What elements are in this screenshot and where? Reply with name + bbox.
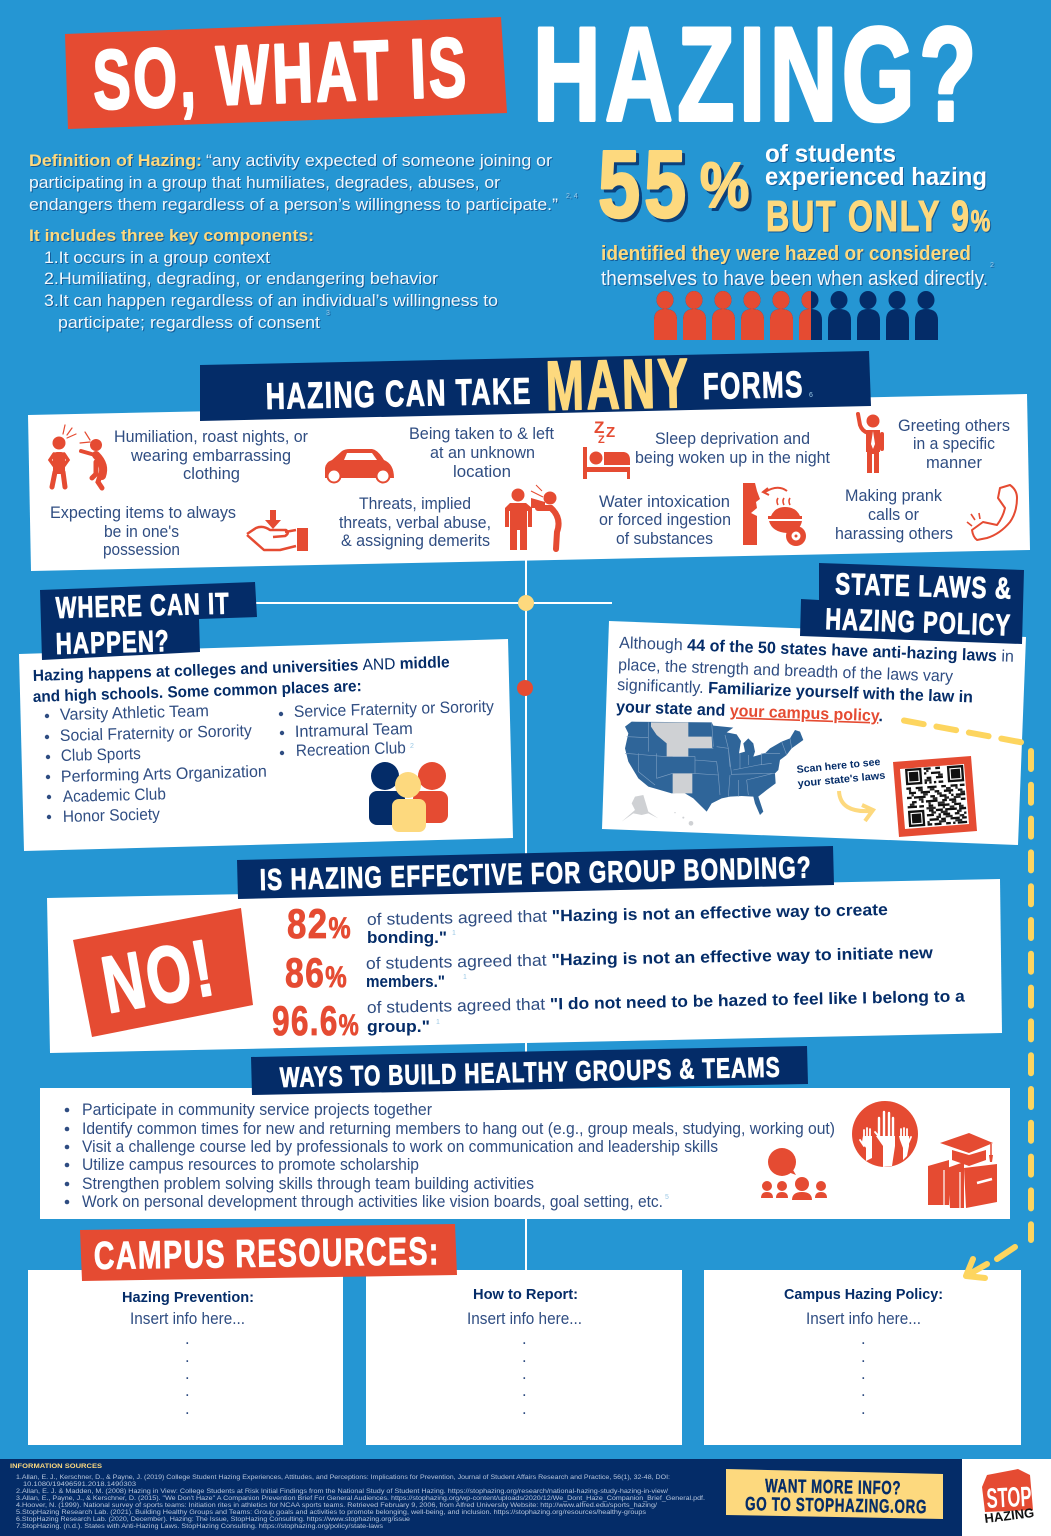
intro text: Hazing happens at colleges and universities AND middle bbox=[33, 654, 450, 685]
form: humiliation: wearing embarrassing bbox=[130, 447, 291, 465]
form: sleep deprivation: Sleep deprivation and bbox=[655, 430, 810, 448]
logo: stop hazing bbox=[962, 1459, 1051, 1536]
panel: is hazing effective bbox=[47, 846, 1002, 1053]
panel: how to report bbox=[366, 1270, 682, 1445]
panel: how to report: . bbox=[522, 1382, 527, 1400]
panel: many forms bbox=[28, 344, 1030, 571]
form: threats: Threats, implied bbox=[359, 495, 471, 513]
icon: books with cap bbox=[928, 1133, 997, 1208]
form: sleep deprivation: being woken up in the night bbox=[635, 449, 830, 467]
key components list: participate; regardless of consent bbox=[58, 313, 320, 332]
arrow: to QR code bbox=[839, 791, 873, 821]
panel: campus hazing policy: . bbox=[861, 1400, 866, 1418]
intro text: and high schools. Some common places are: bbox=[33, 678, 362, 706]
callout: want more info bbox=[726, 1469, 943, 1519]
stat text: of students experienced hazing bbox=[765, 140, 987, 191]
stat text: of students experienced hazing: of students bbox=[765, 140, 896, 168]
form: prank calls bbox=[835, 487, 953, 543]
panel: campus hazing policy: Campus Hazing Policy: bbox=[784, 1287, 943, 1303]
panel: campus hazing policy: . bbox=[861, 1348, 866, 1366]
stat: 86 percent: members." bbox=[366, 973, 445, 991]
panel: hazing prevention bbox=[28, 1270, 343, 1445]
callout: want more info: GO TO STOPHAZING.ORG bbox=[745, 1494, 927, 1518]
state laws text: your state and your campus policy. bbox=[616, 698, 883, 725]
panel: hazing prevention: . bbox=[185, 1382, 190, 1400]
heading: hazing can take many forms: MANY bbox=[545, 344, 691, 425]
form: water intoxication: of substances bbox=[616, 530, 713, 548]
heading: hazing can take many forms bbox=[200, 344, 871, 425]
panel: how to report: . bbox=[522, 1348, 527, 1366]
form: expecting items: be in one's bbox=[104, 523, 179, 541]
stat: 82 percent: 82% bbox=[287, 900, 352, 947]
panel: how to report: . bbox=[522, 1365, 527, 1383]
stat: but only 9 percent: BUT ONLY 9% bbox=[766, 192, 992, 241]
panel: campus hazing policy: . bbox=[861, 1382, 866, 1400]
form: greeting others: in a specific bbox=[913, 435, 995, 453]
form: prank calls: calls or bbox=[868, 506, 919, 524]
list: common places left: Honor Society bbox=[63, 805, 161, 826]
icon: hand receiving bbox=[247, 510, 308, 551]
form: greeting others bbox=[898, 417, 1010, 472]
panel: how to report: How to Report: bbox=[473, 1287, 578, 1303]
callout: NO!: NO! bbox=[95, 922, 222, 1030]
heading: campus resources bbox=[80, 1224, 457, 1281]
stat: 86 percent bbox=[285, 944, 933, 996]
arrow: dashed path to campus policy bbox=[904, 720, 1031, 1278]
list: ways: Visit a challenge course led by professionals to work on communication and leadership skills bbox=[82, 1138, 718, 1156]
definition text block: endangers them regardless of a person’s willingness to participate.” bbox=[29, 195, 558, 214]
stat: 86 percent: 86% bbox=[285, 949, 348, 996]
key components list: 3.It can happen regardless of an individual’s willingness to bbox=[44, 291, 498, 310]
stat: 82 percent bbox=[287, 900, 888, 947]
list: ways: Work on personal development through activities like vision boards, goal setting, etc. bbox=[82, 1193, 663, 1211]
definition text block bbox=[29, 151, 578, 214]
list: common places left: Academic Club bbox=[63, 785, 166, 806]
stat: 55 percent: % bbox=[700, 149, 752, 221]
information sources: 4.Hoover, N. (1999). National survey of sports teams: Initiation rites in athletics for NCAA sports teams. Retrieved February 9, 2006, from Alfred University Website: http://www.alfred.edu/sports_hazing/ bbox=[16, 1502, 657, 1509]
form: water intoxication: or forced ingestion bbox=[599, 511, 731, 529]
form: sleep deprivation bbox=[635, 430, 830, 467]
scan here label: Scan here to see bbox=[796, 756, 881, 776]
title bbox=[65, 1, 981, 149]
stat: 96.6 percent: 1 bbox=[436, 1019, 440, 1026]
form: expecting items bbox=[50, 504, 236, 559]
information sources: 7.StopHazing. (n.d.). States with Anti-Hazing Laws. StopHazing Consulting. https://stophazing.org/policy/state-laws bbox=[16, 1523, 383, 1530]
form: threats: & assigning demerits bbox=[341, 532, 490, 550]
panel: how to report: Insert info here... bbox=[467, 1310, 582, 1328]
logo: stop hazing: HAZING bbox=[984, 1505, 1035, 1526]
stat: 96.6 percent bbox=[272, 988, 966, 1044]
icon: bed with zzz bbox=[583, 418, 630, 479]
state laws text: significantly. Familiarize yourself with the law in bbox=[617, 676, 973, 706]
list: ways: Strengthen problem solving skills through team building activities bbox=[82, 1175, 534, 1193]
key components list: 2.Humiliating, degrading, or endangering behavior bbox=[44, 269, 438, 288]
callout: want more info: WANT MORE INFO? bbox=[765, 1476, 901, 1499]
panel: how to report: . bbox=[522, 1330, 527, 1348]
panel: where can it happen bbox=[19, 582, 513, 851]
panel: hazing prevention: . bbox=[185, 1365, 190, 1383]
stat: 96.6 percent: group." bbox=[367, 1018, 430, 1036]
form: taken to unknown location: Being taken to & left bbox=[409, 425, 554, 443]
panel: campus hazing policy: . bbox=[861, 1365, 866, 1383]
panel: how to report: . bbox=[522, 1400, 527, 1418]
list: ways bbox=[65, 1101, 835, 1211]
icon: greeting man bbox=[858, 414, 882, 473]
panel: campus hazing policy: . bbox=[861, 1330, 866, 1348]
stat: 96.6 percent: 96.6% bbox=[272, 997, 360, 1044]
icon: car bbox=[325, 449, 394, 484]
panel: hazing prevention: . bbox=[185, 1400, 190, 1418]
stat explanation bbox=[601, 243, 994, 290]
list: ways: Participate in community service projects together bbox=[82, 1101, 432, 1119]
intro text bbox=[33, 654, 450, 706]
information sources bbox=[10, 1463, 705, 1530]
stat: 96.6 percent: of students agreed that "I do not need to be hazed to feel like I belong to a bbox=[367, 988, 966, 1017]
form: expecting items: possession bbox=[103, 541, 180, 559]
icon: bed with zzz: Z bbox=[598, 434, 605, 446]
stat text: of students experienced hazing: experienced hazing bbox=[765, 163, 987, 191]
key components list bbox=[29, 226, 498, 332]
heading: where can it happen: HAPPEN? bbox=[55, 625, 170, 661]
stat: 82 percent: bonding." bbox=[367, 929, 447, 947]
form: threats bbox=[339, 495, 491, 550]
heading: hazing can take many forms: 6 bbox=[809, 392, 813, 399]
list: ways: Utilize campus resources to promote scholarship bbox=[82, 1156, 419, 1174]
map of United States bbox=[622, 722, 803, 826]
form: prank calls: Making prank bbox=[845, 487, 943, 505]
definition text block: 2, 4 bbox=[566, 193, 578, 200]
stat explanation: themselves to have been when asked directly. bbox=[601, 268, 988, 290]
panel: campus hazing policy: Insert info here... bbox=[806, 1310, 921, 1328]
list: common places left: Club Sports bbox=[61, 745, 141, 765]
key components list: It includes three key components: bbox=[29, 226, 314, 245]
list: ways: Identify common times for new and returning members to hang out (e.g., group meals, studying, working out) bbox=[82, 1120, 835, 1138]
information sources: 1.Allan, E. J., Kerschner, D., & Payne, J. (2019) College Student Hazing Experiences, Attitudes, and Perceptions: Implications for Prevention, Journal of Student Affairs Research and Practice, 56(1), 32-48, DOI: bbox=[16, 1474, 670, 1481]
definition text block: participating in a group that humiliates, degrades, abuses, or bbox=[29, 173, 500, 192]
panel: state laws and hazing policy bbox=[602, 563, 1026, 845]
stat: 86 percent: 1 bbox=[463, 974, 467, 981]
list: common places right bbox=[279, 698, 495, 760]
information sources: 10.1080/19496591.2018.1490303 bbox=[23, 1481, 137, 1488]
form: humiliation: clothing bbox=[183, 465, 240, 483]
pictogram: ten students bbox=[654, 291, 938, 340]
icon: man with megaphone bbox=[505, 485, 559, 550]
stat: 86 percent: of students agreed that "Hazing is not an effective way to initiate new bbox=[366, 944, 933, 973]
scan here label: your state's laws bbox=[797, 770, 886, 790]
heading: where can it happen bbox=[40, 582, 257, 661]
state laws text: Although 44 of the 50 states have anti-hazing laws in bbox=[619, 634, 1014, 666]
icon: raised hands bbox=[852, 1101, 918, 1167]
heading: state laws bbox=[800, 563, 1024, 644]
heading: hazing can take many forms: FORMS bbox=[702, 364, 804, 407]
scan here label bbox=[796, 756, 886, 790]
state laws text bbox=[616, 634, 1014, 725]
stat: 82 percent: of students agreed that "Hazing is not an effective way to create bbox=[367, 901, 888, 929]
form: water intoxication: Water intoxication bbox=[599, 493, 730, 511]
icon: discussion group bbox=[761, 1148, 827, 1200]
stat: 82 percent: 1 bbox=[452, 930, 456, 937]
form: humiliation bbox=[114, 428, 308, 483]
panel: campus hazing policy bbox=[704, 1270, 1021, 1445]
list: common places left: Performing Arts Organization bbox=[61, 763, 267, 786]
icon: bed with zzz: Z bbox=[594, 418, 604, 437]
information sources: INFORMATION SOURCES bbox=[10, 1463, 103, 1470]
stat explanation: identified they were hazed or considered bbox=[601, 243, 971, 265]
definition text block: Definition of Hazing: bbox=[29, 151, 202, 170]
list: common places left bbox=[45, 702, 267, 826]
panel: hazing prevention: Hazing Prevention: bbox=[122, 1290, 254, 1306]
form: prank calls: harassing others bbox=[835, 525, 953, 543]
information sources: 3.Allan, E., Payne, J., & Kerschner, D. (2015). "We Don't Haze" A Companion Prevention Brief For General Audiences. https://stophazing.org/wp-content/uploads/2020/12/We_Dont_Haze_Companion_Brief_General.pdf. bbox=[16, 1495, 705, 1502]
icon: group of people bbox=[369, 762, 448, 832]
list: common places left: Varsity Athletic Team bbox=[60, 702, 209, 724]
state laws text: place, the strength and breadth of the laws vary bbox=[618, 656, 954, 686]
dots on connector line bbox=[517, 595, 534, 696]
form: greeting others: Greeting others bbox=[898, 417, 1010, 435]
information sources: 6.StopHazing Research Lab. (2020, December). Hazing: The Issue, StopHazing Consulting. https://www.stophazing.org/issue bbox=[16, 1516, 411, 1523]
icon: forced ingestion bbox=[743, 483, 806, 546]
panel: hazing prevention: . bbox=[185, 1330, 190, 1348]
information sources: 2.Allan, E. J. & Madden, M. (2008) Hazing in View: College Students at Risk Initial Findings from the National Study of Student Hazing. https://stophazing.org/research/national-hazing-study-hazing-in-view/ bbox=[16, 1488, 668, 1495]
form: taken to unknown location bbox=[409, 425, 554, 481]
form: water intoxication bbox=[599, 493, 731, 548]
heading: is hazing effective: IS HAZING EFFECTIVE FOR GROUP BONDING? bbox=[259, 851, 812, 897]
panel: ways to build healthy groups bbox=[40, 1046, 1010, 1219]
key components list: 1.It occurs in a group context bbox=[44, 248, 270, 267]
form: greeting others: manner bbox=[926, 454, 982, 472]
form: expecting items: Expecting items to always bbox=[50, 504, 236, 522]
definition text block: “any activity expected of someone joining or bbox=[206, 151, 552, 170]
form: threats: threats, verbal abuse, bbox=[339, 514, 491, 532]
heading: ways to build: WAYS TO BUILD HEALTHY GROUPS & TEAMS bbox=[279, 1052, 781, 1093]
heading: campus resources: CAMPUS RESOURCES: bbox=[94, 1230, 440, 1278]
stat explanation: 2 bbox=[990, 262, 994, 269]
list: ways: 5 bbox=[665, 1194, 669, 1201]
heading: where can it happen: WHERE CAN IT bbox=[55, 587, 230, 625]
list: common places right: Intramural Team bbox=[295, 720, 413, 741]
form: humiliation: Humiliation, roast nights, or bbox=[114, 428, 308, 446]
icon: arguing people bbox=[50, 425, 103, 488]
information sources: 5.StopHazing Research Lab. (2021). Building Healthy Groups and Teams: Group goals and activities to promote belonging, well-being, and inclusion. https://stophazing.org/resources/healthy-groups bbox=[16, 1509, 646, 1516]
list: common places right: 2 bbox=[410, 743, 414, 750]
list: common places left: Social Fraternity or Sorority bbox=[60, 722, 253, 745]
list: common places right: Recreation Club bbox=[296, 739, 406, 760]
title: SO, WHAT IS bbox=[91, 20, 470, 127]
QR code bbox=[893, 756, 977, 837]
heading: hazing can take many forms: HAZING CAN TAKE bbox=[265, 370, 532, 417]
list: common places right: Service Fraternity or Sorority bbox=[294, 698, 495, 721]
panel: hazing prevention: . bbox=[185, 1348, 190, 1366]
form: taken to unknown location: at an unknown bbox=[430, 444, 535, 462]
icon: telephone bbox=[967, 485, 1017, 540]
footer bbox=[0, 1459, 1051, 1536]
icon: bed with zzz: Z bbox=[606, 424, 615, 441]
key components list: 3 bbox=[326, 310, 330, 317]
stat: 55 percent: 55 bbox=[598, 131, 690, 238]
form: taken to unknown location: location bbox=[453, 463, 511, 481]
panel: hazing prevention: Insert info here... bbox=[130, 1310, 245, 1328]
